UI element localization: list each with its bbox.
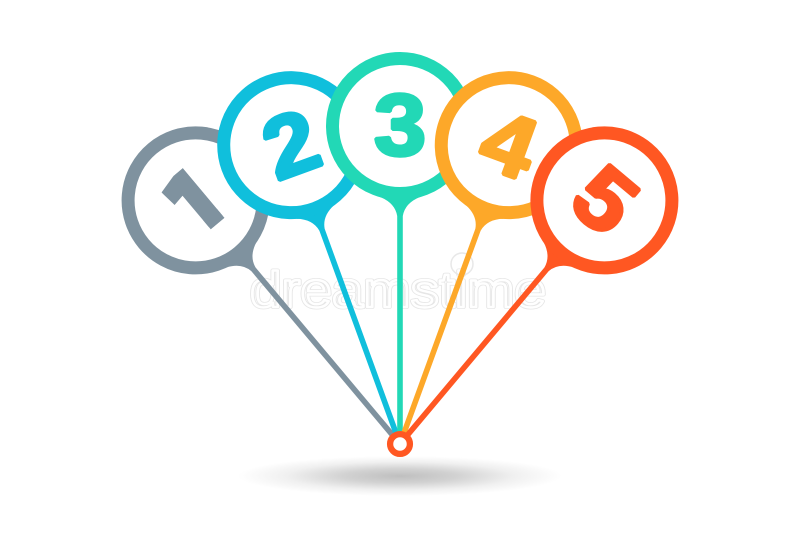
stem 2 [297,205,415,440]
number 4: 4 [468,90,550,199]
circle 1 [100,105,291,295]
balloon 3: teal [332,58,468,432]
balloon 2: blue [205,59,459,456]
stem 1 [226,242,408,448]
circle 2 [205,59,378,232]
number 1: 1 [147,146,247,251]
watermark: dreamstime [250,262,546,318]
balloon 5: orange [356,105,700,478]
ground shadow [238,456,562,496]
balloon 1: grey [122,126,393,436]
stem 5 [392,242,574,448]
watermark: dreamstime [250,262,546,318]
circle 3 [332,58,468,194]
number 2: 2 [250,90,332,199]
stem 4 [385,205,503,440]
balloon 4: amber [341,59,595,456]
circle 4 [422,59,595,232]
number 5: 5 [553,146,656,254]
circle 5 [509,105,700,295]
stem 3 [380,197,420,432]
number 3: 3 [374,77,426,174]
pin ring [390,434,410,454]
